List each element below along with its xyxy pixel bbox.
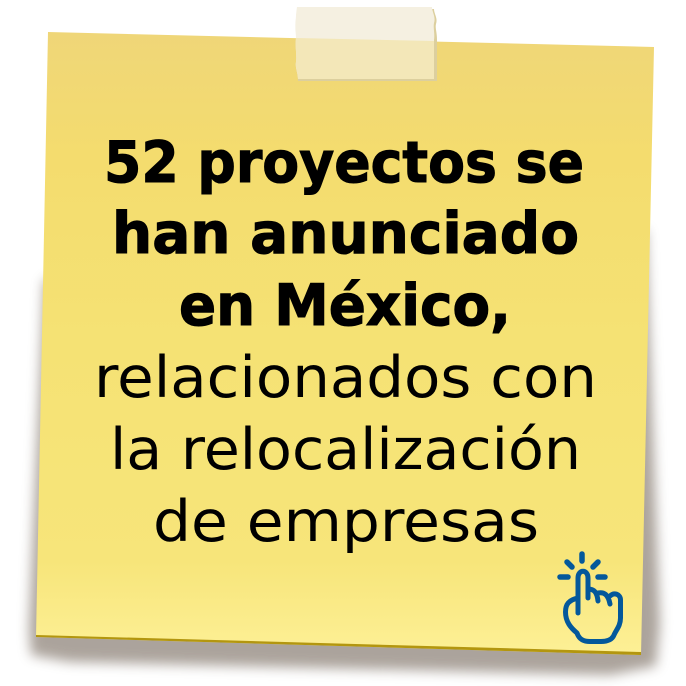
- regular text line 1: relacionados con: [94, 345, 597, 411]
- bold heading line 2: han anunciado: [112, 201, 579, 267]
- icon: tapping hand: [560, 554, 620, 642]
- main message text: [94, 130, 597, 555]
- bold heading line 3: en México,: [179, 273, 511, 339]
- regular text line 3: de empresas: [153, 489, 539, 555]
- note shadow: [29, 230, 660, 675]
- regular text line 2: la relocalización: [110, 417, 581, 483]
- bold heading line 1: 52 proyectos se: [104, 130, 584, 196]
- tape: [296, 7, 437, 81]
